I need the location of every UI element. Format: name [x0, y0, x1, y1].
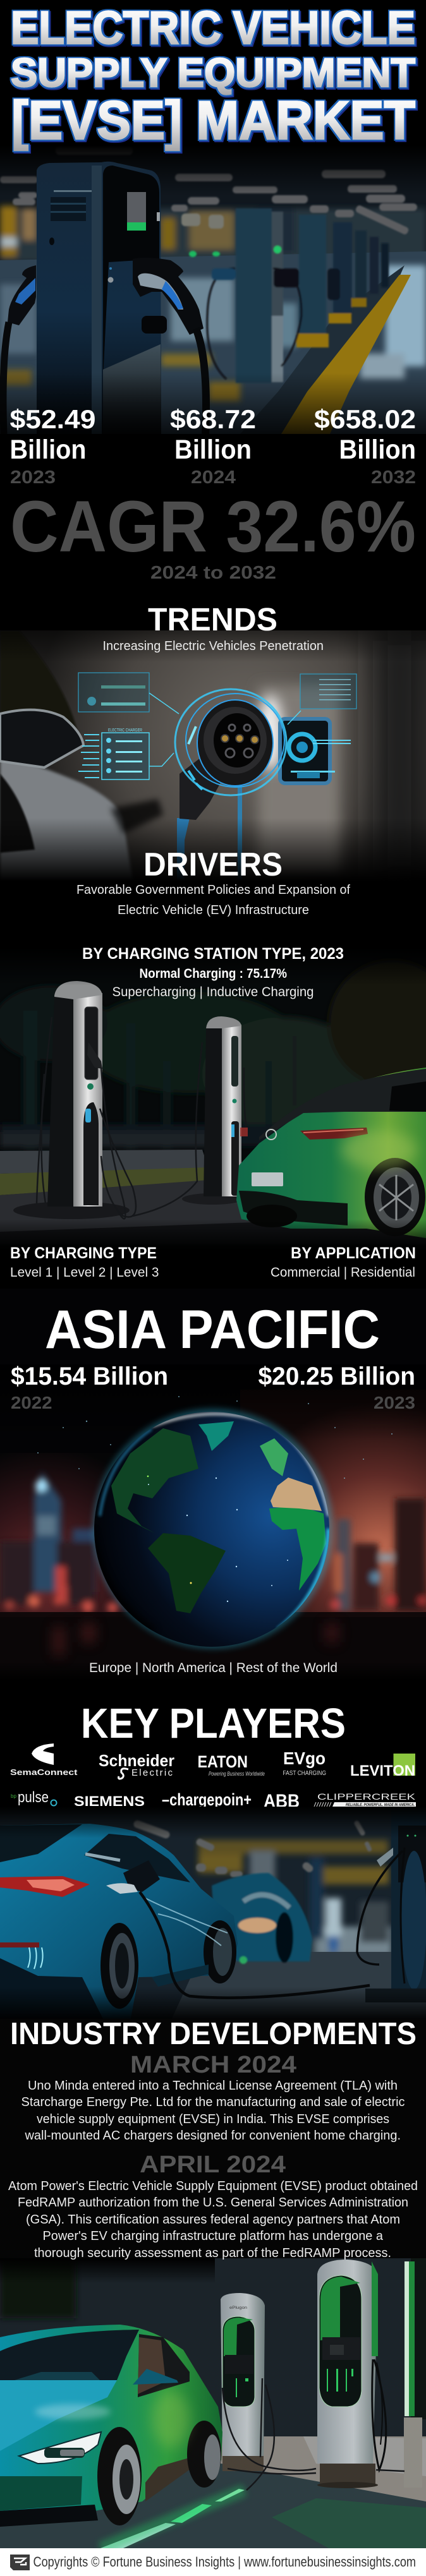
- holographic panel: electric charger: [78, 728, 174, 779]
- heading: drivers: Electric Vehicle (EV) Infrastructure: [118, 903, 309, 917]
- heading: by charging station type: Supercharging | Inductive Charging: [113, 985, 313, 999]
- development: April 2024: FedRAMP authorization from the U.S. General Services Administration: [18, 2196, 408, 2210]
- stat: asia pacific 2022: 2022: [11, 1393, 52, 1412]
- stat: asia pacific 2023: 2023: [374, 1393, 415, 1412]
- lit pillar: [404, 2258, 426, 2488]
- heading: by application: BY APPLICATION: [291, 1244, 416, 1262]
- stat: 2023 market size: $52.49: [10, 404, 96, 434]
- stars: [37, 1396, 393, 1479]
- floor cables: [222, 2378, 405, 2490]
- charging connector: [175, 689, 286, 881]
- charger A: ePlugon: [229, 2306, 247, 2310]
- logo: ABB: ABB: [264, 1791, 300, 1812]
- development: March 2024: Uno Minda entered into a Technical License Agreement (TLA) with: [28, 2079, 398, 2093]
- stat: 2032 market size: 2032: [371, 467, 416, 488]
- logo: SemaConnect: SemaConnect: [10, 1767, 78, 1777]
- industry developments background: [0, 2019, 426, 2265]
- heading: drivers: Favorable Government Policies and Expansion of: [76, 883, 350, 897]
- development: March 2024: Starcharge Energy Pte. Ltd for the manufacturing and sale of electric: [21, 2095, 405, 2109]
- logo: Eaton: [197, 1752, 265, 1777]
- heading: industry developments: INDUSTRY DEVELOPMENTS: [10, 2017, 417, 2051]
- silver car body: [0, 762, 131, 877]
- stat: asia pacific 2023: $20.25 Billion: [258, 1363, 415, 1390]
- heading: drivers: [76, 846, 350, 917]
- holographic panel: electric charger: ELECTRIC CHARGER: [108, 728, 142, 733]
- heading: by application: [271, 1244, 416, 1280]
- logo: EVgo: [283, 1748, 326, 1777]
- charger A: [221, 2293, 265, 2471]
- logo: Leviton: [350, 1754, 415, 1779]
- stat: asia pacific 2022: $15.54 Billion: [11, 1363, 168, 1390]
- second car: [212, 1873, 312, 1964]
- stat: 2024 market size: Billion: [174, 435, 252, 465]
- stat: 2024 market size: [170, 404, 256, 488]
- heading: by charging station type: [82, 945, 344, 999]
- heading: by charging type: Level 1 | Level 2 | Level 3: [10, 1265, 159, 1280]
- logo: Schneider Electric: [99, 1751, 174, 1779]
- logo: ClipperCreek: CLIPPERCREEK: [317, 1791, 416, 1802]
- logo: Eaton: Powering Business Worldwide: [209, 1771, 265, 1777]
- icon: Fortune Business Insights logo: [10, 2555, 30, 2570]
- logo: ChargePoint: –chargepoin+: [162, 1790, 252, 1809]
- charging handles and cables: [3, 258, 206, 434]
- asia pacific photo: globe over city at dusk: [0, 1394, 426, 1666]
- stat: 2032 market size: Billion: [339, 435, 416, 465]
- heading: trends: TRENDS: [148, 601, 277, 637]
- logo: Siemens: SIEMENS: [74, 1793, 145, 1809]
- logo: Schneider Electric: Electric: [131, 1767, 173, 1778]
- charger one: [13, 981, 130, 1219]
- heading: by charging type: BY CHARGING TYPE: [10, 1244, 157, 1262]
- green car: [236, 1068, 426, 1238]
- development: April 2024: (GSA). This certification assures federal agency partners that Atom: [26, 2213, 400, 2227]
- development: March 2024: MARCH 2024: [130, 2052, 296, 2078]
- stat: 2032 market size: [314, 404, 416, 488]
- blurred city skyline: [0, 1472, 426, 1613]
- charger B: [317, 2260, 386, 2488]
- logo: Schneider Electric: Schneider: [99, 1751, 174, 1770]
- logo: ClipperCreek: RELIABLE. POWERFUL. MADE IN AMERICA.: [346, 1803, 415, 1807]
- CAGR figure: 2024 to 2032: [150, 563, 276, 583]
- logo: Leviton: LEVITON: [350, 1762, 415, 1779]
- heading: asia pacific: ASIA PACIFIC: [45, 1299, 380, 1360]
- development: March 2024: [21, 2052, 405, 2143]
- development: March 2024: vehicle supply equipment (EVSE) in India. This EVSE comprises: [37, 2112, 389, 2126]
- logo: SemaConnect: [10, 1743, 78, 1777]
- heading: drivers: DRIVERS: [143, 846, 283, 883]
- holographic panel: top right: [288, 674, 356, 725]
- footer: [0, 2548, 426, 2576]
- charger and cable: [106, 1807, 426, 2002]
- far chargers in the row: [189, 208, 389, 383]
- ceiling lights: [133, 1819, 372, 1877]
- heading: trends: Increasing Electric Vehicles Penetration: [102, 639, 324, 653]
- development: April 2024: [8, 2152, 418, 2260]
- logo: EVgo: EVgo: [283, 1748, 326, 1768]
- stat: asia pacific 2023: [258, 1363, 415, 1412]
- stat: 2023 market size: [10, 404, 96, 488]
- development: March 2024: wall-mounted AC chargers designed for convenient home charging.: [25, 2129, 401, 2143]
- green car: [0, 2325, 222, 2527]
- heading: trends: [102, 601, 324, 653]
- logo: EVgo: FAST CHARGING: [283, 1770, 326, 1777]
- heading: key players: KEY PLAYERS: [81, 1700, 346, 1747]
- stat: 2023 market size: 2023: [10, 467, 56, 488]
- stat: 2024 market size: $68.72: [170, 404, 256, 434]
- heading: by charging station type: BY CHARGING STATION TYPE, 2023: [82, 945, 344, 963]
- logo: bp pulse: pulse: [18, 1789, 49, 1806]
- development: April 2024: thorough security assessment as part of the FedRAMP process.: [34, 2246, 391, 2260]
- other regions: Europe | North America | Rest of the World: [89, 1661, 338, 1675]
- development: April 2024: APRIL 2024: [140, 2152, 286, 2178]
- stat: 2032 market size: $658.02: [314, 404, 416, 434]
- logo: Eaton: EATON: [197, 1752, 248, 1771]
- globe: [82, 1409, 333, 1649]
- charge port display: [280, 719, 351, 783]
- main charger: [37, 162, 161, 434]
- heading: by charging station type: Normal Charging : 75.17%: [139, 966, 287, 981]
- stat: 2023 market size: Billion: [10, 435, 86, 465]
- green ground light strip: [100, 2489, 245, 2548]
- heading: by application: Commercial | Residential: [271, 1265, 415, 1280]
- hero photo: EV charging stations in a parking garage: [0, 145, 426, 434]
- stat: 2024 market size: 2024: [191, 467, 236, 488]
- development: April 2024: Power's EV charging infrastructure platform has undergone a: [43, 2229, 384, 2243]
- trends photo: charging connector with holographic HUD: [0, 630, 426, 881]
- logo: bp pulse: bp: [11, 1793, 16, 1799]
- title: [11, 3, 415, 151]
- station photo: chargers and green car at night: [0, 948, 426, 1251]
- holographic panel: top left: [78, 673, 179, 714]
- logo: ClipperCreek: [314, 1791, 416, 1807]
- charging cables: [35, 1059, 246, 1219]
- development: April 2024: Atom Power's Electric Vehicle Supply Equipment (EVSE) product obtained: [8, 2179, 418, 2193]
- charger two: [182, 1016, 243, 1205]
- teal car: [0, 1824, 238, 2021]
- key players photo: teal EV charging in a garage: [0, 1807, 426, 2021]
- closing photo: green EV at a fast-charging station: [0, 2258, 426, 2548]
- title: SUPPLY EQUIPMENT: [11, 50, 415, 95]
- stat: asia pacific 2022: [11, 1363, 168, 1412]
- heading: by charging type: [10, 1244, 159, 1280]
